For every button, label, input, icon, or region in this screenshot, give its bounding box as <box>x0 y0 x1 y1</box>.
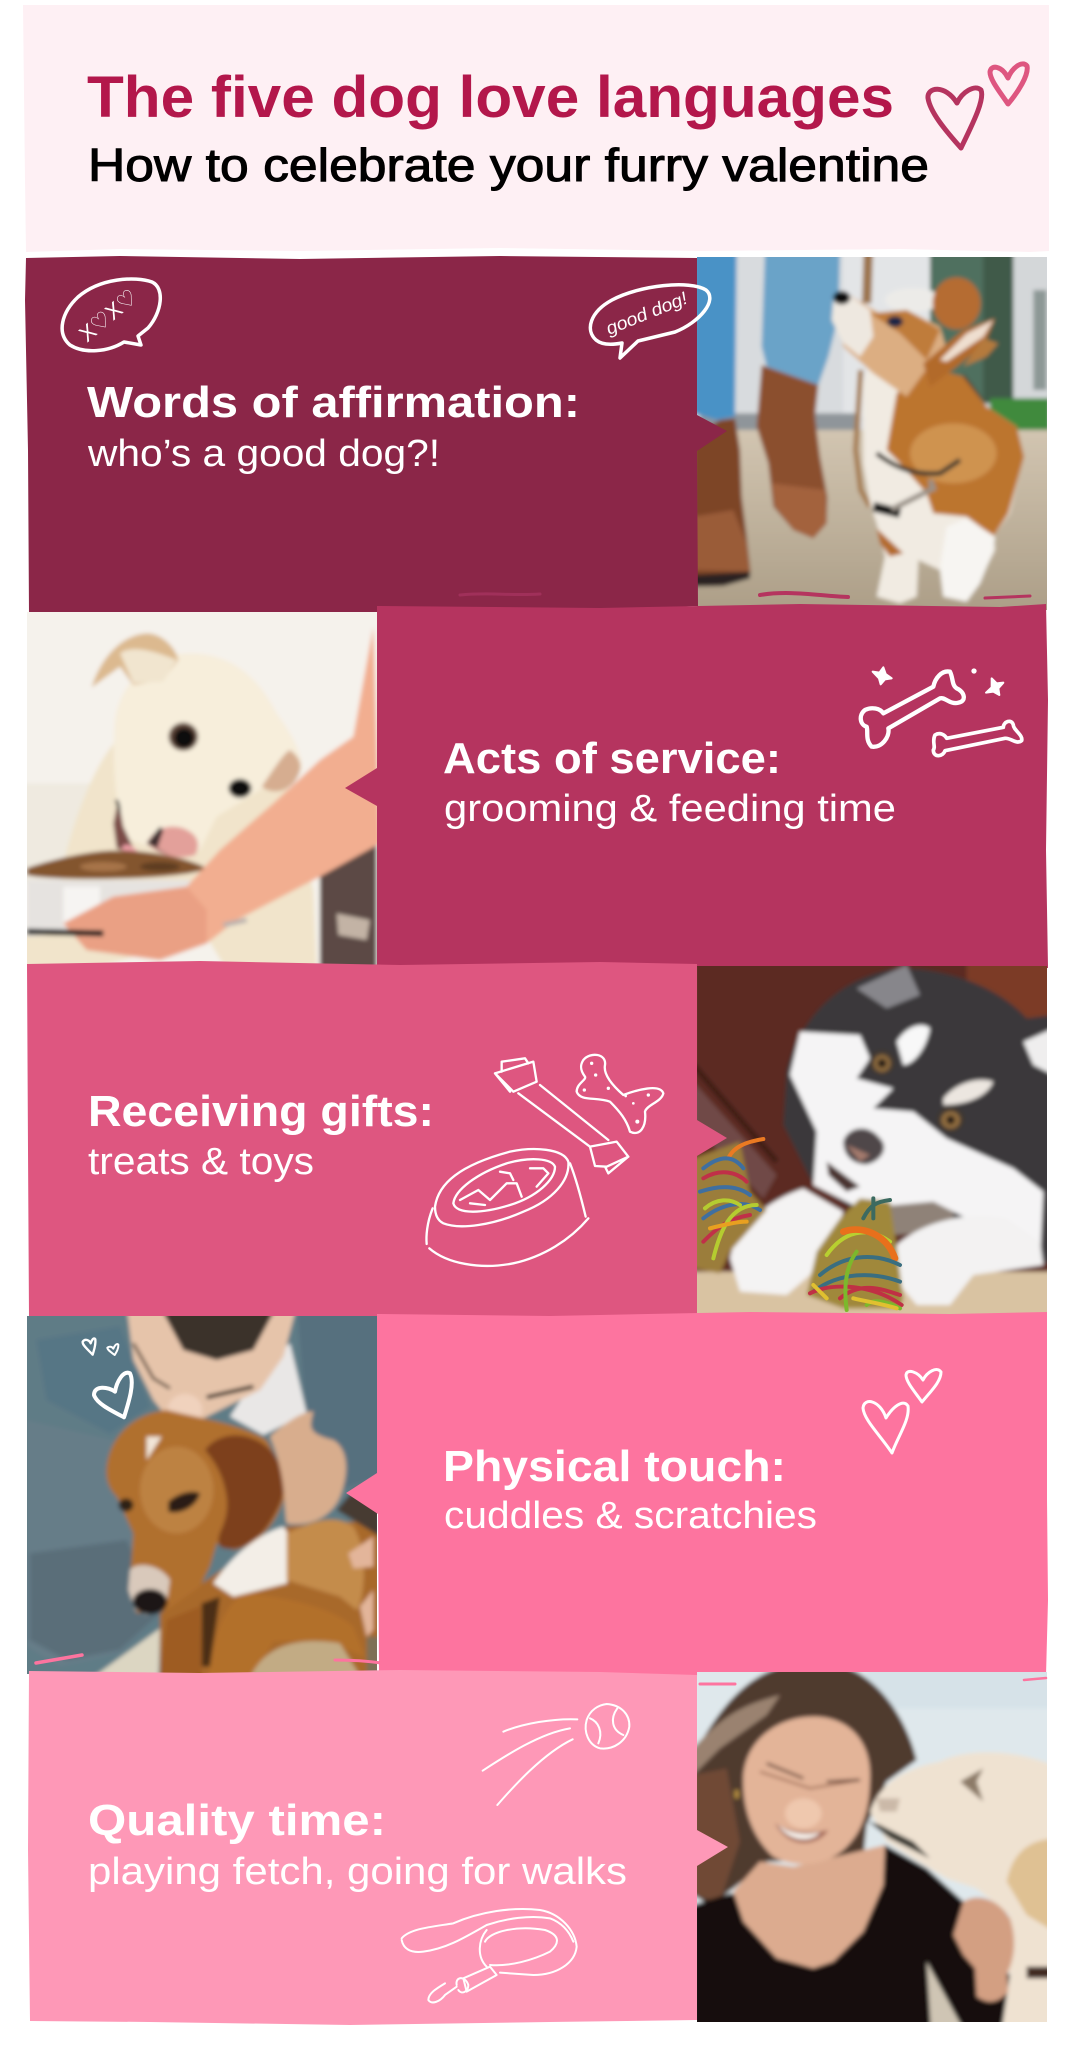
section 2: acts of service <box>13 603 1048 977</box>
header panel <box>23 5 1049 252</box>
icon: hearts on denim <box>83 1338 132 1417</box>
rope toy threads <box>700 1139 902 1310</box>
section 4: physical touch <box>13 1307 1048 1687</box>
heading: Receiving gifts: <box>88 1087 434 1136</box>
section 5: quality time <box>28 1662 1063 2042</box>
icon: good dog speech bubble <box>590 285 710 358</box>
title: The five dog love languages <box>87 65 894 130</box>
subheading: grooming & feeding time <box>444 788 896 830</box>
icon: tennis ball with motion lines <box>483 1704 629 1805</box>
subtitle: How to celebrate your furry valentine <box>88 139 929 191</box>
heading: Words of affirmation: <box>87 378 580 427</box>
panel: physical touch background <box>346 1312 1048 1677</box>
subheading: who’s a good dog?! <box>87 433 440 475</box>
panel: receiving gifts background <box>27 961 727 1319</box>
icon: hearts <box>928 64 1027 148</box>
heading: Acts of service: <box>443 734 781 783</box>
icon: xoxo speech bubble: X♡X♡ <box>74 284 142 347</box>
heading: Quality time: <box>88 1796 386 1845</box>
panel: acts of service background <box>345 604 1048 970</box>
photo: husky puppy with rope toy <box>697 966 1047 1314</box>
icon: hearts <box>863 1370 941 1453</box>
panel: quality time background <box>28 1670 728 2025</box>
icon: food bowl, rope bone and biscuit <box>426 1055 663 1266</box>
seam stroke marks <box>460 593 1030 598</box>
panel: words of affirmation background <box>25 256 727 614</box>
icon: good dog speech bubble: good dog! <box>603 288 690 339</box>
subheading: cuddles & scratchies <box>444 1495 817 1537</box>
icon: bones and sparkles <box>861 667 1022 756</box>
photo: woman laughing with golden retriever <box>697 1672 1047 2022</box>
seam stroke marks <box>36 1655 388 1664</box>
section 1: words of affirmation <box>25 250 1057 617</box>
photo: labrador eating from a bowl <box>27 612 377 964</box>
subheading: treats & toys <box>88 1141 314 1183</box>
icon: leash <box>402 1909 577 2002</box>
icon: xoxo speech bubble <box>62 279 160 351</box>
section 3: receiving gifts <box>27 958 1063 1332</box>
heading: Physical touch: <box>443 1442 786 1491</box>
subheading: playing fetch, going for walks <box>88 1851 627 1893</box>
photo: corgi looking up on a walk <box>693 250 1057 617</box>
photo: man kissing beagle mix <box>27 1316 377 1674</box>
seam stroke marks <box>700 1678 1046 1684</box>
